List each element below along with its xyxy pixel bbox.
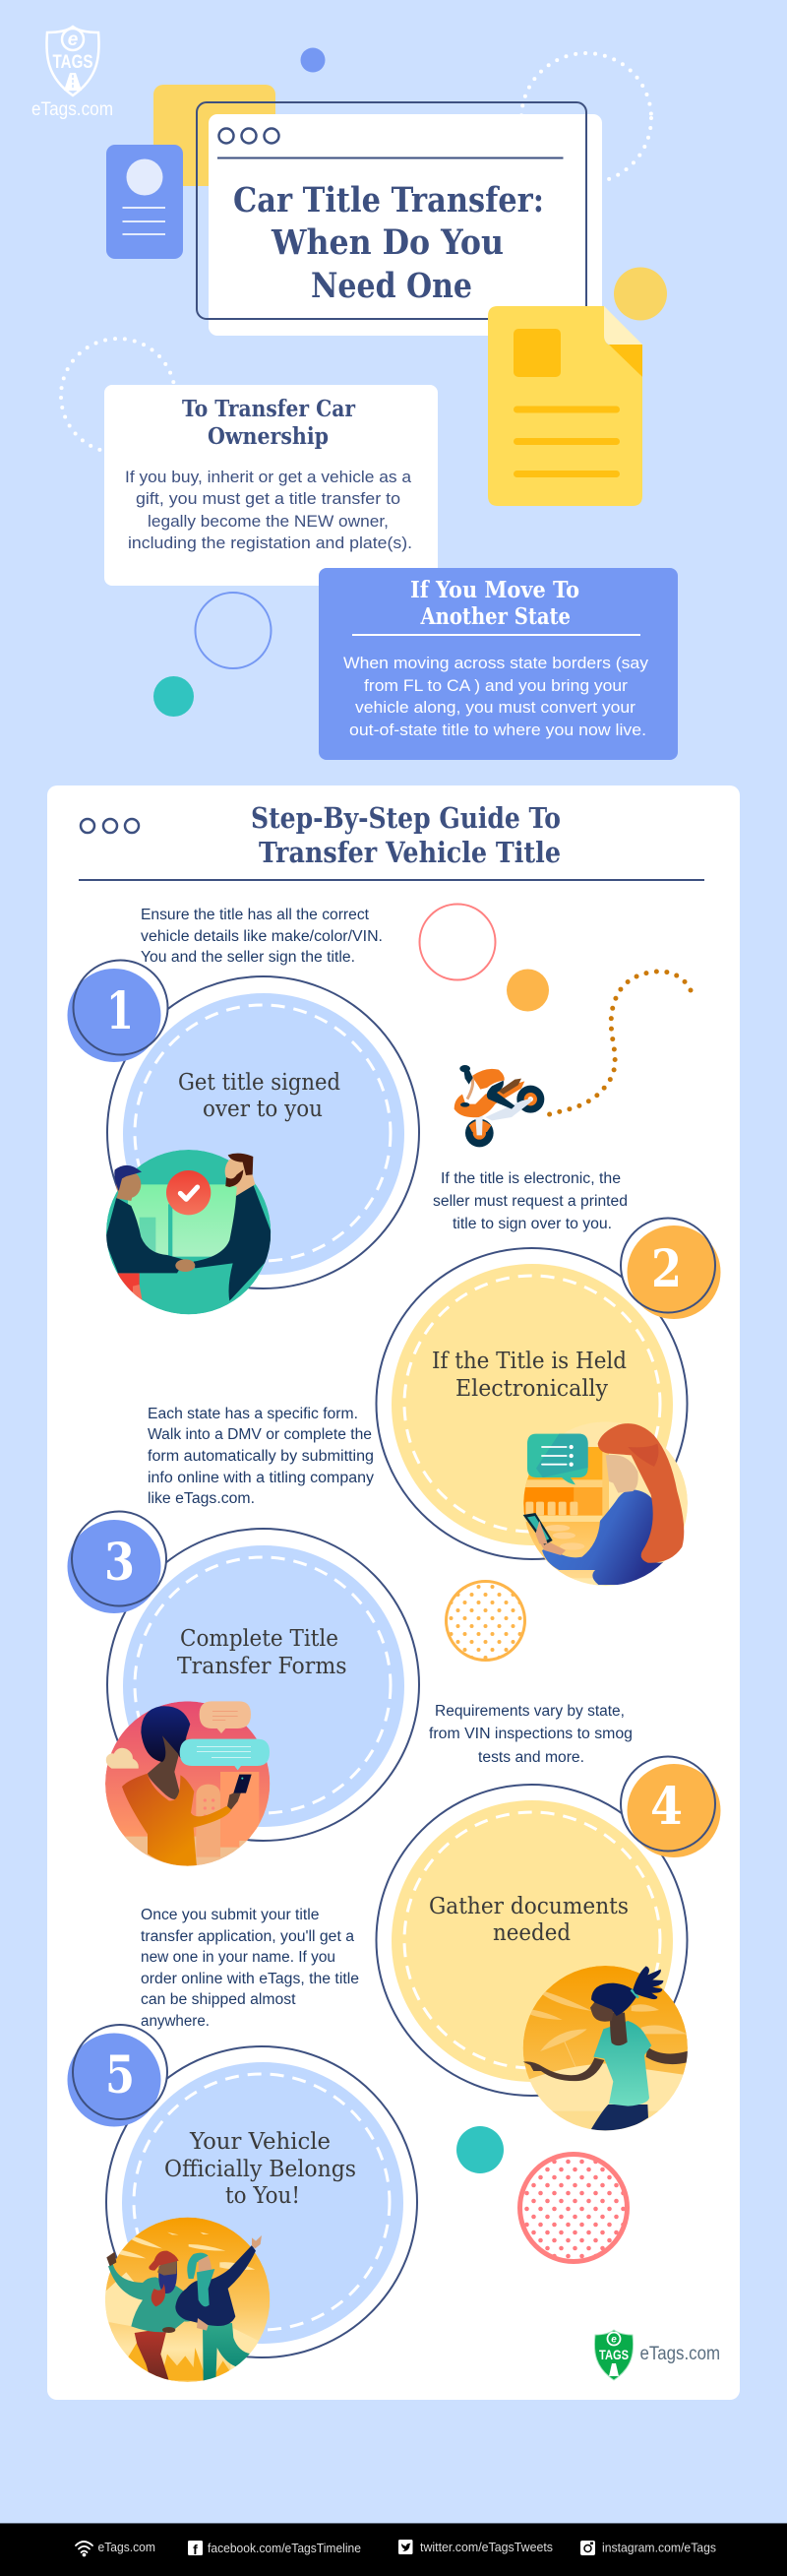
heading: Another State xyxy=(420,603,571,630)
step 3 badge: 3 xyxy=(104,1533,135,1593)
icon: yellow document xyxy=(488,306,642,506)
step 2 text: title to sign over to you. xyxy=(453,1216,612,1232)
step 5 circle: Your Vehicle xyxy=(189,2129,331,2155)
logo: eTags green shield xyxy=(594,2330,720,2380)
heading: If You Move To xyxy=(410,577,579,603)
logo: eTags white shield: eTags.com xyxy=(31,99,113,120)
title: Car Title Transfer: xyxy=(233,180,544,220)
title xyxy=(233,180,544,306)
body text: from FL to CA ) and you bring your xyxy=(364,677,629,695)
heading: step-by-step guide xyxy=(251,801,561,869)
step 2 circle xyxy=(376,1248,687,1559)
step 1 circle: over to you xyxy=(203,1097,323,1122)
decorative blue dot xyxy=(301,47,325,73)
decorative red dotted circle xyxy=(519,2154,628,2262)
body text: legally become the NEW owner, xyxy=(148,513,389,531)
icon: facebook: f xyxy=(193,2542,198,2557)
step 5 xyxy=(67,1907,417,2384)
decorative dotted circle left xyxy=(61,339,175,453)
step 5 text: Once you submit your title xyxy=(141,1907,319,1923)
step 2 badge xyxy=(621,1219,720,1319)
step 4 badge: 4 xyxy=(650,1777,683,1837)
icon: wifi xyxy=(76,2542,92,2555)
step 2 xyxy=(376,1170,720,1586)
step 3 text: like eTags.com. xyxy=(148,1490,255,1507)
icon: blue ID card xyxy=(106,145,183,259)
panel: title window xyxy=(197,102,602,336)
decorative ring xyxy=(195,593,272,668)
window dots xyxy=(81,819,139,833)
step 3 xyxy=(67,1406,419,1869)
step 3 text: info online with a titling company xyxy=(148,1470,374,1486)
step 5 text: can be shipped almost xyxy=(141,1991,296,2008)
heading xyxy=(410,577,579,630)
body text: gift, you must get a title transfer to xyxy=(136,490,400,508)
step 3 text xyxy=(148,1406,374,1507)
step 4 circle: needed xyxy=(493,1920,571,1946)
decorative dotted circle top right xyxy=(521,53,651,183)
heading: step-by-step guide: Transfer Vehicle Title xyxy=(259,836,561,869)
body text: out-of-state title to where you now live. xyxy=(349,722,646,739)
body text xyxy=(125,469,412,552)
step 2 circle: If the Title is Held xyxy=(432,1349,627,1374)
decorative gold circle xyxy=(614,268,667,321)
step 3 circle xyxy=(107,1529,419,1841)
step 1 text: Ensure the title has all the correct xyxy=(141,907,370,923)
step 1 text: vehicle details like make/color/VIN. xyxy=(141,928,383,945)
step 3 text: Walk into a DMV or complete the xyxy=(148,1426,372,1443)
illustration: woman on the beach xyxy=(523,1966,691,2134)
footer link: instagram: instagram.com/eTags xyxy=(602,2540,716,2555)
illustration: two hikers celebrating xyxy=(105,2218,272,2384)
step 5 text: anywhere. xyxy=(141,2013,210,2030)
panel: if you move to another state xyxy=(319,568,678,760)
step 5 text: order online with eTags, the title xyxy=(141,1971,359,1987)
step 4 text: Requirements vary by state, xyxy=(435,1703,625,1720)
step 2 text xyxy=(433,1170,628,1232)
step 4 text xyxy=(429,1703,633,1766)
decorative orange circle xyxy=(507,969,549,1012)
body text: If you buy, inherit or get a vehicle as a xyxy=(125,469,412,486)
step 4 text: from VIN inspections to smog xyxy=(429,1726,633,1742)
footer link: facebook: facebook.com/eTagsTimeline xyxy=(208,2541,361,2555)
illustration: handshake xyxy=(105,1150,271,1314)
body text xyxy=(343,655,649,739)
icon: twitter xyxy=(398,2540,413,2554)
step 5 text: new one in your name. If you xyxy=(141,1949,335,1966)
step 3 circle: Complete Title xyxy=(180,1626,338,1652)
step 5 badge xyxy=(67,2025,167,2126)
step 1 xyxy=(67,907,419,1314)
step 5 badge: 5 xyxy=(105,2045,135,2105)
icon: facebook xyxy=(188,2541,203,2557)
logo: eTags green shield: e xyxy=(611,2335,617,2345)
decorative teal circle xyxy=(153,676,194,717)
body text: vehicle along, you must convert your xyxy=(355,699,636,717)
step 2 circle: Electronically xyxy=(455,1376,608,1402)
step 5 text xyxy=(141,1907,359,2030)
footer bar xyxy=(0,2523,787,2576)
step 4 badge xyxy=(621,1756,720,1857)
yellow square behind title xyxy=(153,85,275,186)
step 4 xyxy=(376,1703,720,2134)
panel: to transfer car ownership xyxy=(104,385,438,586)
body text: including the registation and plate(s). xyxy=(128,534,412,552)
step 1 text xyxy=(141,907,383,966)
step 1 circle: Get title signed xyxy=(178,1070,340,1096)
step 3 badge xyxy=(67,1512,166,1613)
step 3 circle: Transfer Forms xyxy=(177,1654,346,1679)
logo: eTags white shield: e xyxy=(68,30,79,50)
heading: To Transfer Car xyxy=(182,396,356,422)
illustration: woman texting xyxy=(105,1701,272,1869)
title: When Do You xyxy=(271,222,504,263)
logo: eTags green shield: eTags.com xyxy=(639,2344,720,2364)
step 4 text: tests and more. xyxy=(478,1749,584,1766)
body text: When moving across state borders (say xyxy=(343,655,649,672)
decorative red ring xyxy=(419,904,496,980)
icon: instagram xyxy=(580,2541,595,2555)
step 3 text: form automatically by submitting xyxy=(148,1448,374,1465)
logo: eTags white shield: TAGS xyxy=(53,52,92,73)
step 3 text: Each state has a specific form. xyxy=(148,1406,358,1422)
heading: Ownership xyxy=(208,423,329,450)
footer link: twitter: twitter.com/eTagsTweets xyxy=(420,2540,553,2554)
step 2 text: seller must request a printed xyxy=(433,1193,628,1210)
decorative teal circle xyxy=(456,2126,504,2173)
panel: step-by-step guide xyxy=(47,785,740,2400)
illustration: woman with phone xyxy=(523,1421,688,1586)
step 4 circle: Gather documents xyxy=(429,1894,629,1919)
heading xyxy=(182,396,356,450)
icon: motorcycle rider xyxy=(454,1065,544,1147)
step 1 badge: 1 xyxy=(106,981,134,1041)
step 1 circle xyxy=(107,976,419,1288)
step 2 text: If the title is electronic, the xyxy=(441,1170,621,1187)
logo: eTags green shield: TAGS xyxy=(599,2347,629,2362)
footer link: website: eTags.com xyxy=(98,2540,155,2554)
step 5 circle xyxy=(106,2046,417,2357)
step 2 badge: 2 xyxy=(651,1239,682,1299)
dotted motorcycle trail xyxy=(546,972,691,1115)
logo: eTags white shield xyxy=(31,27,113,120)
step 5 circle: Officially Belongs xyxy=(164,2157,356,2182)
step 1 text: You and the seller sign the title. xyxy=(141,949,355,966)
title: Need One xyxy=(311,266,472,306)
step 1 badge xyxy=(67,961,167,1062)
step 5 circle: to You! xyxy=(225,2183,300,2209)
step 5 text: transfer application, you'll get a xyxy=(141,1928,354,1945)
step 4 circle xyxy=(376,1785,687,2096)
decorative orange dotted circle xyxy=(447,1581,525,1660)
heading: step-by-step guide: Step-By-Step Guide To xyxy=(251,801,561,835)
